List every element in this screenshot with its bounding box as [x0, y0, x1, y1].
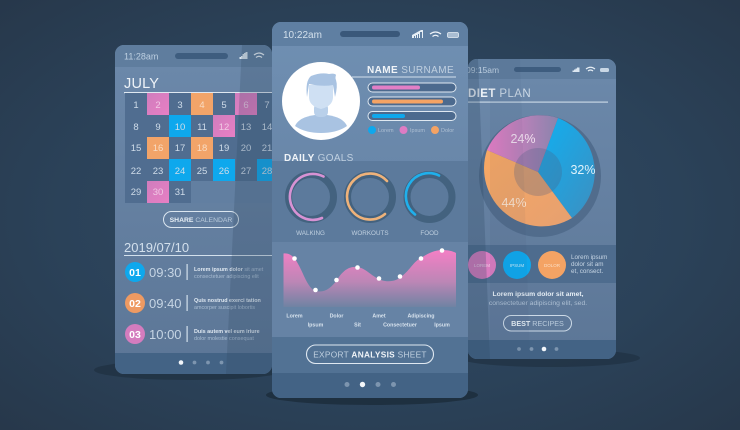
goal rings: FOOD	[420, 230, 439, 237]
chart axis labels: Lorem	[286, 314, 303, 320]
calendar grid: 23	[153, 166, 163, 177]
calendar grid: 14	[262, 122, 272, 133]
best recipes button	[504, 316, 572, 331]
calendar grid: 28	[262, 166, 272, 177]
export button band: EXPORT ANALYSIS SHEET	[313, 350, 427, 360]
calendar grid: 31	[175, 187, 185, 198]
calendar grid: 30	[153, 187, 163, 198]
calendar grid: 25	[197, 166, 207, 177]
calendar grid: 16	[153, 143, 163, 154]
calendar grid: 18	[197, 143, 207, 154]
progress bars	[368, 83, 456, 120]
calendar grid: 15	[131, 143, 141, 154]
calendar grid: 22	[131, 166, 141, 177]
calendar grid: 1	[133, 100, 139, 111]
left status bar: 11:28am	[124, 52, 158, 62]
nutrient band: dolor sit am	[571, 261, 604, 268]
diet heading: DIET PLAN	[468, 88, 531, 100]
left status bar	[115, 45, 272, 67]
calendar grid: 27	[241, 166, 251, 177]
calendar grid: 7	[264, 100, 270, 111]
schedule list: consectetuer adipiscing elit	[194, 274, 259, 280]
nutrient band: LOREM	[474, 263, 490, 268]
center phone: profile	[272, 22, 468, 398]
name heading: NAME SURNAME	[367, 65, 454, 76]
goals band	[272, 161, 468, 242]
schedule list: 03	[129, 329, 141, 341]
calendar grid: 10	[175, 122, 185, 133]
calendar grid: 20	[241, 143, 251, 154]
center status bar	[272, 22, 468, 46]
calendar grid: 2	[155, 100, 161, 111]
best recipes button: BEST RECIPES	[511, 319, 564, 328]
progress legend: Lorem	[378, 128, 394, 134]
calendar grid: 21	[262, 143, 272, 154]
calendar grid: 3	[177, 100, 183, 111]
schedule list: Quis nostrud exerci tation	[194, 298, 261, 304]
schedule list: 01	[129, 267, 141, 279]
left phone: calendar	[115, 45, 272, 374]
progress legend	[368, 126, 454, 134]
chart axis labels: Sit	[354, 322, 361, 328]
right status bar	[466, 59, 616, 79]
nutrient band: Lorem ipsum	[571, 254, 607, 261]
nutrient band: DOLOR	[544, 263, 561, 268]
chart axis labels: Ipsum	[308, 322, 324, 328]
calendar grid: 19	[219, 143, 229, 154]
phone shadows	[94, 349, 640, 405]
area chart	[272, 242, 468, 337]
center status bar: 10:22am	[283, 30, 322, 41]
right footer with page dots	[468, 340, 616, 359]
profile avatar	[282, 62, 360, 140]
right phone: diet plan	[466, 59, 616, 359]
daily goals heading: DAILY GOALS	[284, 153, 354, 164]
progress legend: Ipsum	[410, 128, 425, 134]
pie chart: 32%	[570, 163, 596, 177]
calendar grid: 11	[197, 122, 207, 133]
chart axis labels: Adipiscing	[407, 314, 435, 320]
calendar grid	[125, 93, 272, 203]
center footer with page dots	[272, 373, 468, 398]
calendar grid: 29	[131, 187, 141, 198]
chart axis labels: Ipsum	[434, 322, 450, 328]
calendar grid: 12	[219, 122, 229, 133]
chart axis labels	[286, 314, 450, 328]
schedule list: Lorem ipsum dolor sit amet	[194, 267, 264, 273]
pie chart: 44%	[501, 196, 527, 210]
calendar grid: 6	[243, 100, 249, 111]
chart axis labels: Amet	[372, 314, 386, 320]
export button band	[272, 337, 468, 373]
share calendar button	[164, 212, 238, 228]
pie chart: 24%	[510, 132, 536, 146]
schedule list: 02	[129, 298, 141, 310]
schedule list: 09:40	[149, 296, 182, 311]
calendar grid: 24	[175, 166, 185, 177]
schedule list: 09:30	[149, 265, 182, 280]
calendar grid: 4	[199, 100, 205, 111]
chart axis labels: Dolor	[330, 314, 343, 320]
date heading: 2019/07/10	[124, 240, 189, 255]
goal rings: WORKOUTS	[351, 230, 389, 237]
schedule list: 10:00	[149, 327, 182, 342]
calendar grid: 5	[221, 100, 227, 111]
diet description	[489, 291, 587, 307]
progress legend: Dolor	[441, 128, 454, 134]
share calendar button: SHARE CALENDAR	[170, 217, 232, 224]
calendar grid: 13	[241, 122, 251, 133]
chart axis labels: Consectetuer	[383, 322, 417, 328]
calendar grid: 8	[133, 122, 139, 133]
schedule list: Duis autem vel eum iriure	[194, 329, 260, 335]
nutrient band: et, consect.	[571, 268, 603, 275]
schedule list: dolor molestie consequat	[194, 336, 254, 342]
right status bar: 09:15am	[466, 65, 499, 75]
schedule list: amcorper suscipit lobortis	[194, 305, 255, 311]
calendar grid: 26	[219, 166, 229, 177]
goal rings	[288, 173, 452, 237]
month heading: JULY	[124, 76, 159, 92]
diet description: consectetuer adipiscing elit, sed.	[489, 300, 587, 307]
pie chart	[479, 115, 601, 237]
calendar grid: 17	[175, 143, 185, 154]
left footer with page dots	[115, 353, 272, 374]
schedule list	[125, 262, 264, 344]
nutrient band	[468, 245, 616, 283]
calendar grid: 9	[155, 122, 161, 133]
goal rings: WALKING	[296, 230, 325, 237]
diet description: Lorem ipsum dolor sit amet,	[492, 291, 584, 298]
nutrient band: IPSUM	[510, 263, 524, 268]
